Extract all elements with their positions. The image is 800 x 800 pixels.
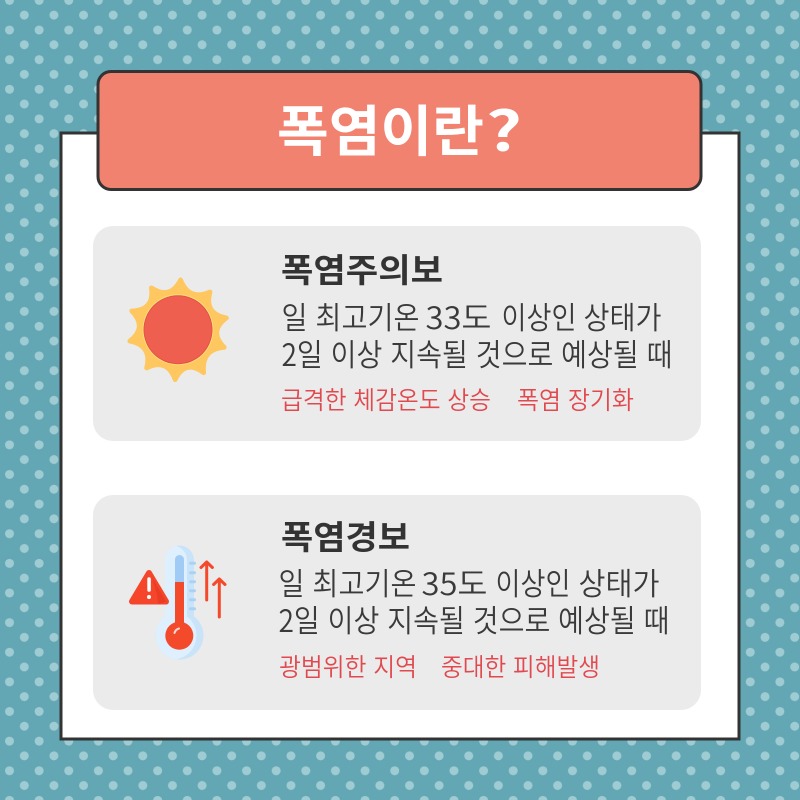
heading: 폭염경보 bbox=[281, 511, 410, 559]
warning triangle bbox=[132, 573, 166, 602]
title: ? bbox=[486, 87, 522, 167]
body text: 상태가 bbox=[578, 559, 660, 604]
thermometer body bbox=[156, 546, 204, 660]
body text: 이상인 bbox=[496, 559, 570, 604]
panel: heat advisory bbox=[93, 226, 701, 441]
icon: thermometer with warning bbox=[132, 540, 225, 665]
rising arrows bbox=[201, 562, 225, 617]
mercury bbox=[175, 555, 184, 582]
panel: white main card bbox=[61, 133, 739, 739]
body text: 상태가 bbox=[584, 293, 662, 338]
red impact labels: 광범위한 지역 bbox=[279, 648, 417, 684]
title banner bbox=[98, 72, 701, 190]
red impact labels bbox=[281, 381, 634, 417]
scale ticks bbox=[190, 563, 194, 609]
heading: 폭염주의보 bbox=[281, 244, 443, 292]
red impact labels bbox=[279, 648, 600, 684]
body text: 일 최고기온 bbox=[282, 293, 420, 338]
red impact labels: 급격한 체감온도 상승 bbox=[281, 381, 491, 417]
body text: 2일 이상 지속될 것으로 예상될 때 bbox=[278, 596, 670, 641]
body text: 33도 bbox=[426, 293, 492, 338]
body text: 2일 이상 지속될 것으로 예상될 때 bbox=[282, 330, 672, 375]
red impact labels: 중대한 피해발생 bbox=[441, 648, 600, 684]
body text bbox=[282, 293, 672, 375]
body text: 일 최고기온 bbox=[278, 559, 416, 604]
panel: heat warning bbox=[93, 495, 701, 710]
body text bbox=[278, 559, 670, 641]
title: 폭염이란 bbox=[277, 87, 484, 167]
red impact labels: 폭염 장기화 bbox=[517, 381, 634, 417]
body text: 35도 bbox=[422, 559, 488, 604]
icon: sun bbox=[130, 280, 226, 380]
body text: 이상인 bbox=[502, 293, 576, 338]
